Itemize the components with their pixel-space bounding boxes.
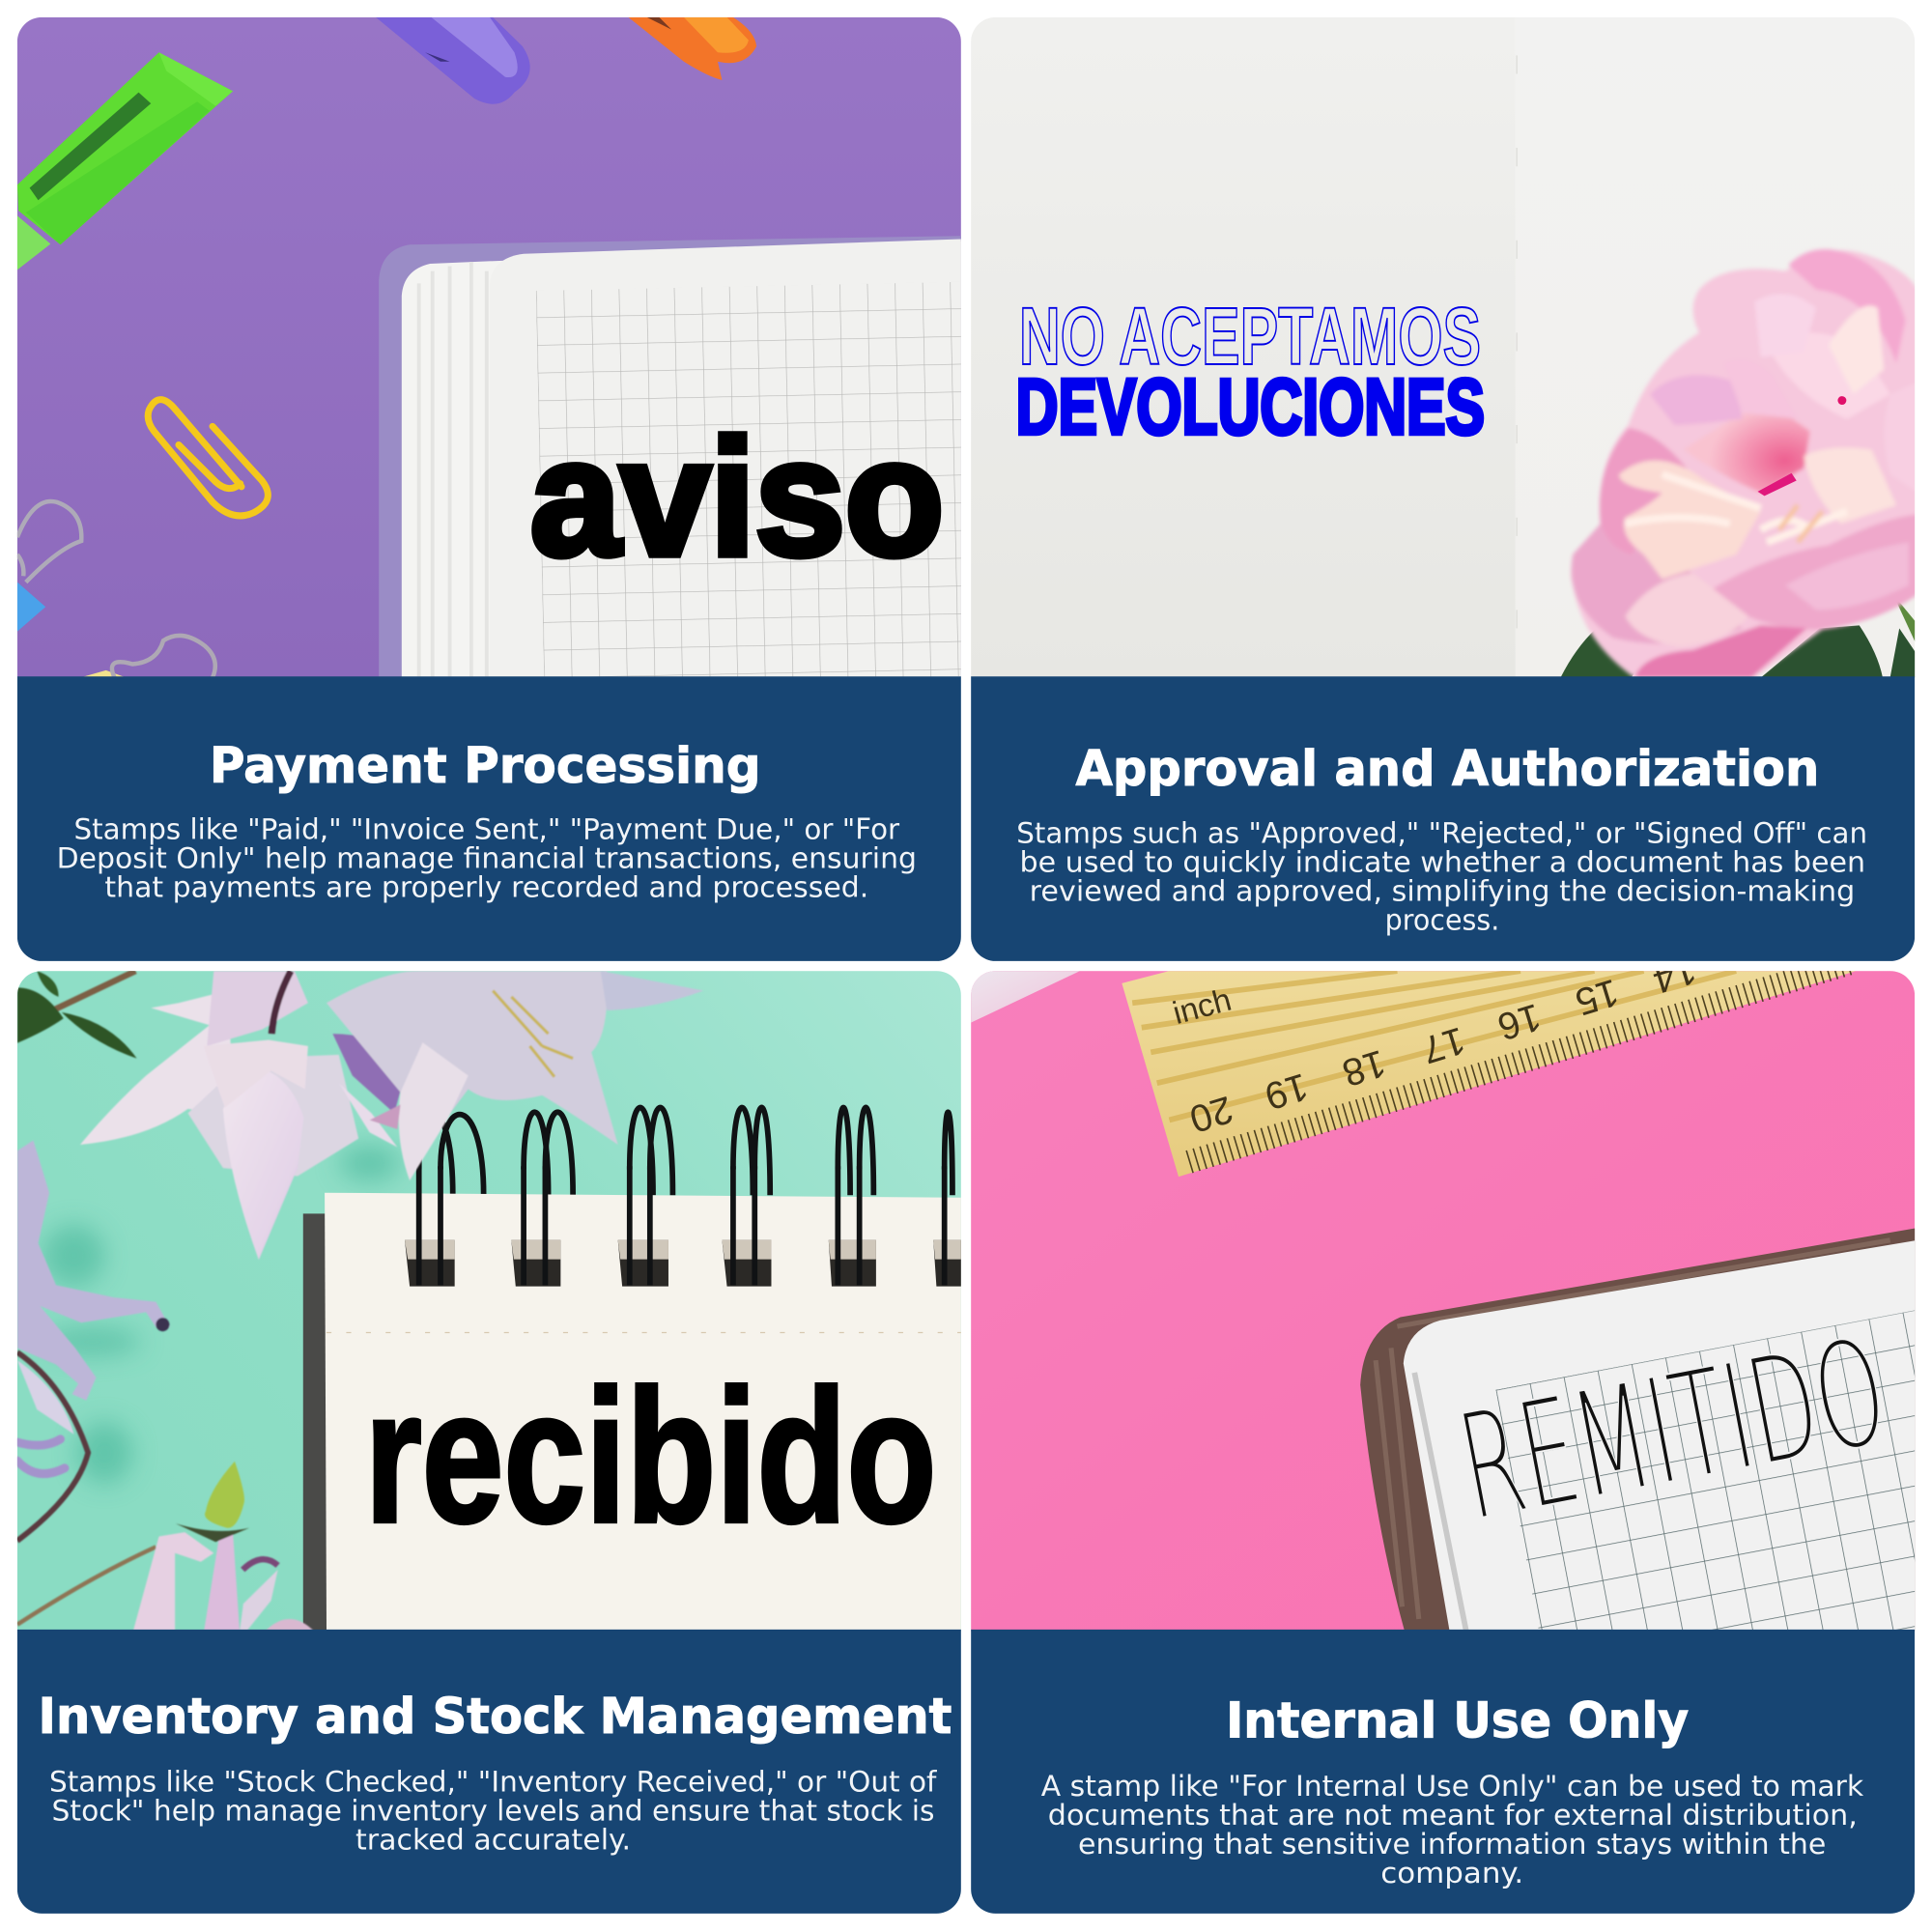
ruler numbers: 17 <box>1417 1018 1470 1071</box>
caption panel <box>971 1630 1915 1919</box>
body text <box>1016 816 1867 936</box>
notebook back cover <box>303 1213 327 1633</box>
body text: be used to quickly indicate whether a document has been <box>1019 845 1865 878</box>
stitch line <box>327 1331 961 1333</box>
stamp text: no aceptamos devoluciones <box>1018 306 1484 437</box>
photo: purple desk with notebook <box>17 17 987 685</box>
body text: Stamps like "Paid," "Invoice Sent," "Payment Due," or "For <box>74 813 900 846</box>
notebook <box>1360 1228 1932 1656</box>
ruler numbers: 18 <box>1338 1041 1391 1094</box>
petals <box>1571 249 1918 678</box>
icon: blue binder clip <box>17 501 81 632</box>
caption panel <box>971 676 1915 966</box>
photo: open white notebook with peony <box>971 17 1918 678</box>
body text: tracked accurately. <box>355 1824 631 1857</box>
spiral holes <box>405 1240 961 1287</box>
ruler numbers: inch <box>1169 982 1236 1032</box>
body text: Stock" help manage inventory levels and ensure that stock is <box>52 1795 934 1828</box>
stamp text: no aceptamos devoluciones: NO ACEPTAMOS <box>1019 291 1481 382</box>
stamp text: aviso: aviso <box>530 406 944 590</box>
panel: approval and authorization <box>971 17 1915 961</box>
icon: green highlighter <box>17 52 233 270</box>
icon: yellow paperclip <box>148 400 268 516</box>
caption panel <box>17 676 961 966</box>
notebook <box>379 236 987 685</box>
ruler numbers <box>1169 949 1701 1141</box>
heading: Internal Use Only <box>1226 1692 1689 1749</box>
photo: teal desk with spiral notebook and flowers <box>17 971 961 1633</box>
body text: A stamp like "For Internal Use Only" can be used to mark <box>1041 1770 1863 1803</box>
body text <box>1041 1770 1863 1889</box>
panel: payment processing <box>17 17 961 961</box>
body text: Stamps such as "Approved," "Rejected," or "Signed Off" can <box>1016 816 1867 849</box>
icon: wooden ruler <box>1122 949 1857 1177</box>
spiral coils behind the page <box>419 1108 952 1195</box>
bottom flower <box>17 1462 314 1632</box>
heading: Inventory and Stock Management <box>39 1689 952 1746</box>
left lily <box>17 1140 170 1541</box>
body text: Stamps like "Stock Checked," "Inventory Received," or "Out of <box>49 1766 937 1799</box>
body text: process. <box>1385 903 1499 936</box>
heading: Payment Processing <box>210 738 761 795</box>
icon: yellow binder clip <box>80 636 215 678</box>
ruler numbers: 19 <box>1260 1065 1313 1118</box>
panel: inventory and stock management <box>17 971 961 1914</box>
body text: reviewed and approved, simplifying the decision-making <box>1030 874 1855 907</box>
pen corner <box>971 971 1080 1023</box>
body text: Deposit Only" help manage financial transactions, ensuring <box>57 842 917 875</box>
main lily <box>80 971 411 1260</box>
stamp text: no aceptamos devoluciones: DEVOLUCIONES <box>1016 363 1485 451</box>
body text: documents that are not meant for external distribution, <box>1048 1799 1858 1832</box>
ruler numbers: 16 <box>1492 995 1546 1048</box>
icon: orange pen clip <box>629 17 756 80</box>
ruler numbers: 15 <box>1571 971 1624 1024</box>
spiral coils front <box>419 1166 945 1285</box>
body text <box>57 813 917 904</box>
body text <box>49 1766 937 1857</box>
icon: purple pen clip <box>376 17 530 104</box>
heading: Approval and Authorization <box>1076 741 1819 798</box>
photo: pink desk with ruler and grid notebook <box>971 949 1932 1656</box>
upper right lily <box>327 971 703 1180</box>
icon: peony flower <box>1560 249 1918 678</box>
caption panel <box>17 1630 961 1919</box>
body text: that payments are properly recorded and processed. <box>104 871 868 904</box>
branch and leaves <box>17 971 137 1059</box>
flowers <box>17 971 703 1632</box>
ruler numbers: 20 <box>1184 1088 1237 1141</box>
leaves <box>1560 594 1916 678</box>
notebook page <box>325 1193 961 1632</box>
body text: ensuring that sensitive information stays within the <box>1078 1828 1826 1861</box>
flower centre accents <box>1758 396 1846 496</box>
panel: internal use only <box>971 971 1915 1914</box>
body text: company. <box>1380 1857 1523 1889</box>
